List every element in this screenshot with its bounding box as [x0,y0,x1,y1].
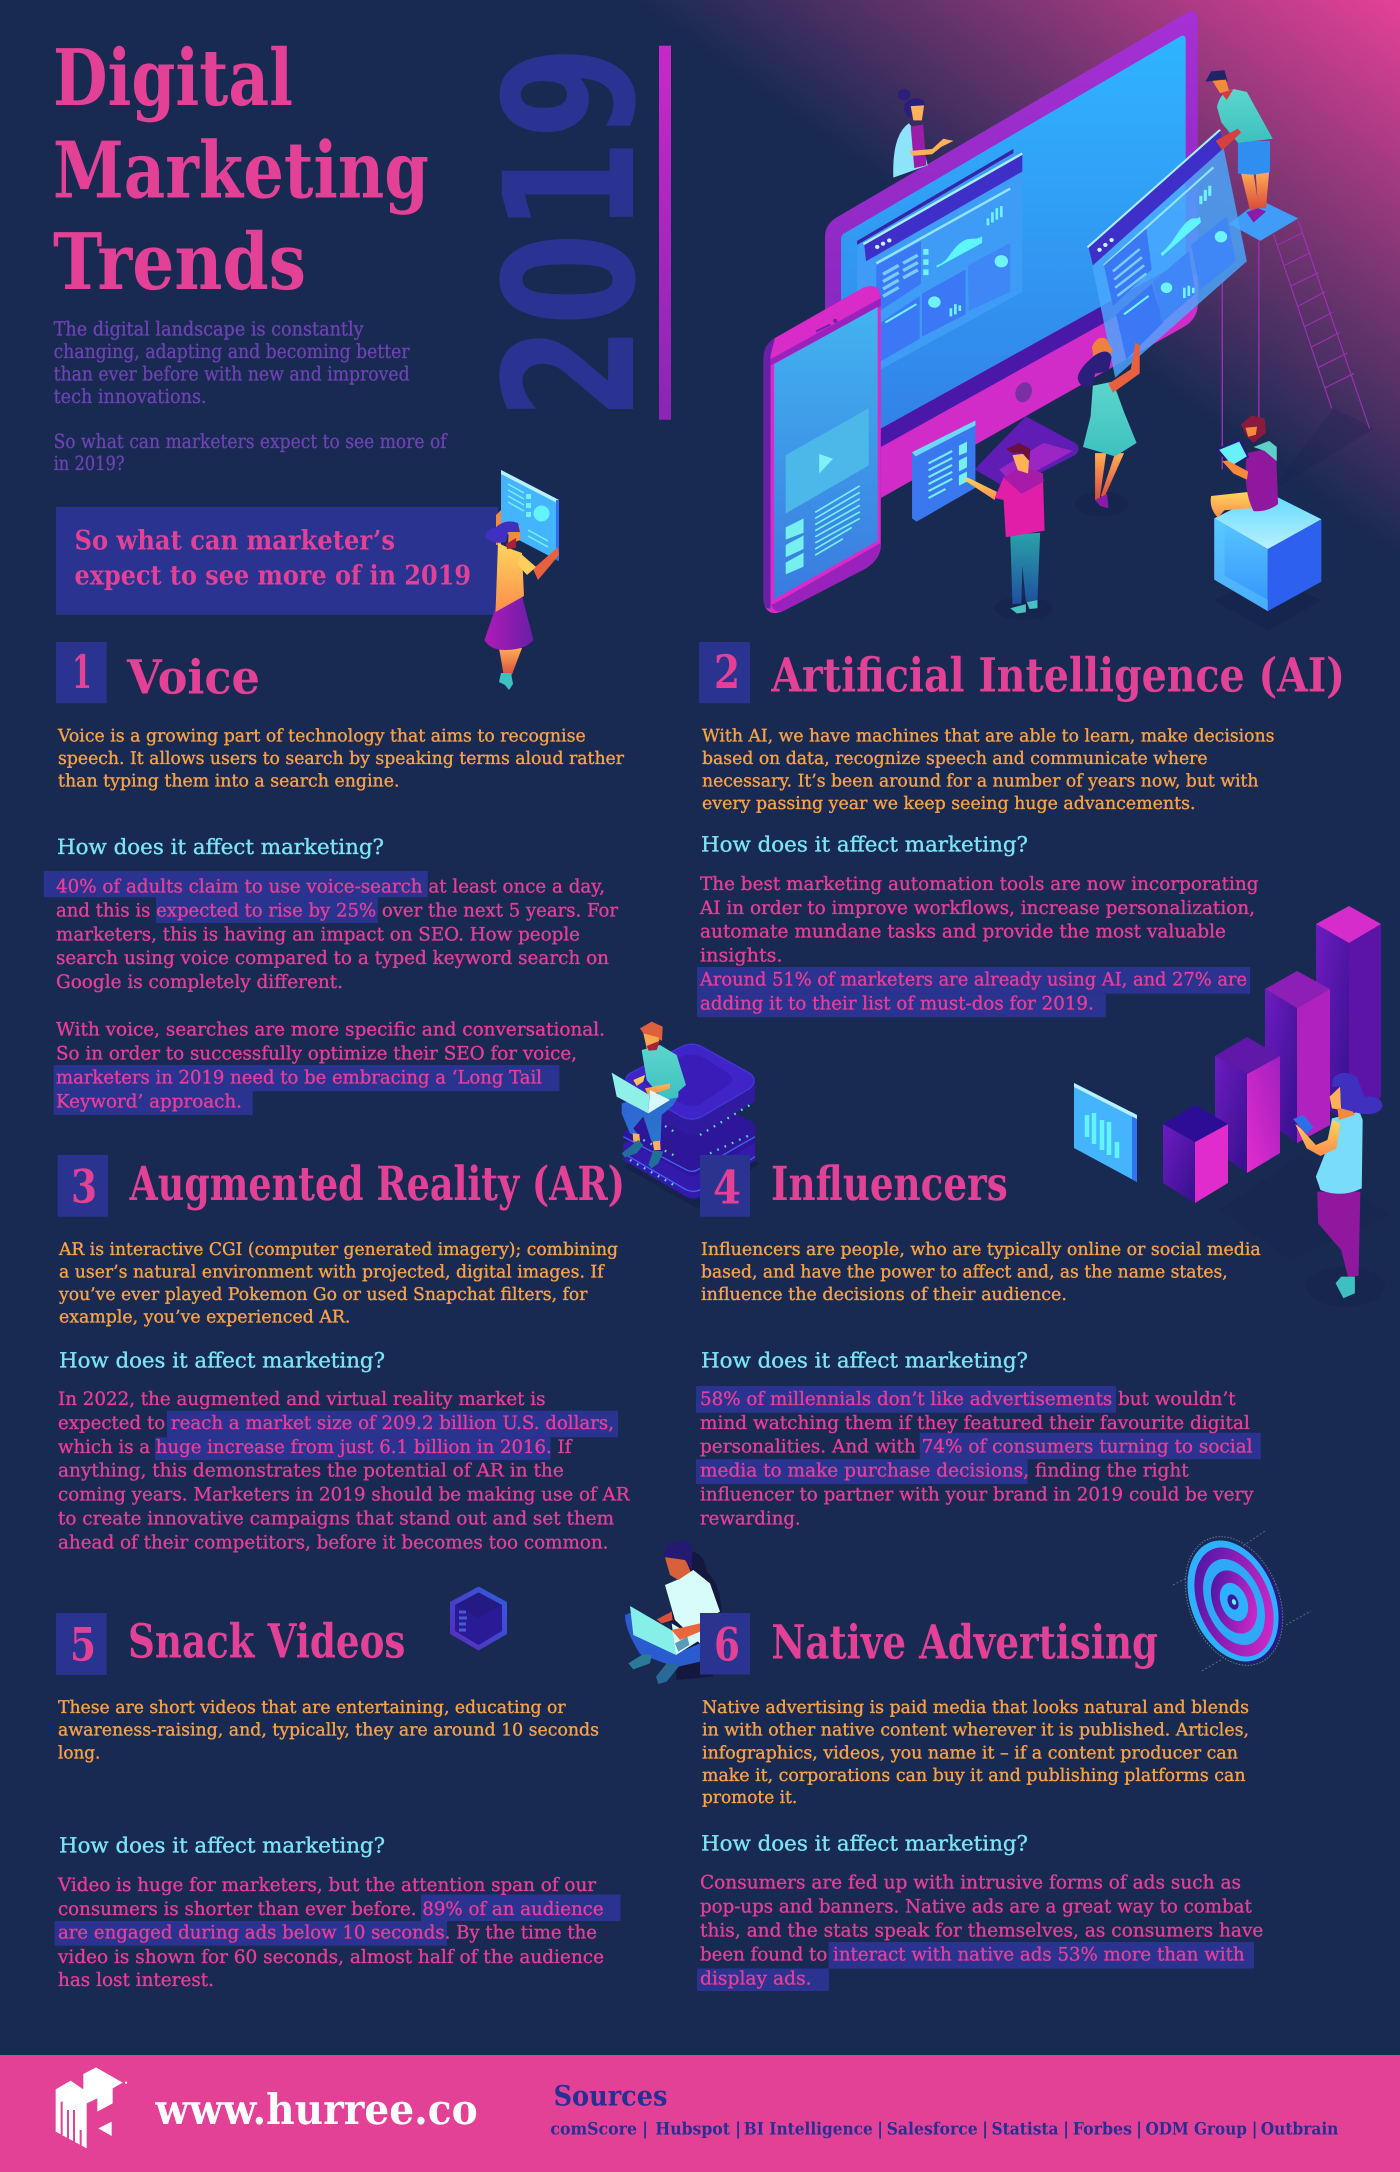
icon: target [1167,1522,1311,1680]
marketing impact text: has lost interest. [58,1970,214,1991]
sources list: | [735,2120,741,2140]
website url: www.hurree.co [154,2085,478,2134]
intro text [54,318,448,475]
body text: than typing them into a search engine. [58,772,400,792]
person: woman with phone [1293,1073,1385,1307]
sources list: BI Intelligence [744,2120,873,2140]
marketing impact text: search using voice compared to a typed keyword search on [56,948,609,969]
marketing impact text: Keyword’ approach. [56,1091,242,1112]
sources list: | [1136,2120,1142,2140]
illustration: monitor with team [763,11,1374,631]
panel: voice [44,642,625,1115]
icon: hexagon [450,1586,507,1650]
marketing impact text [54,1875,620,1991]
marketing impact text: media to make purchase decisions, finding the right [700,1461,1189,1482]
footer content [56,2067,1338,2148]
sources list: comScore [550,2120,637,2140]
subheading: How does it affect marketing? [59,1348,385,1372]
person detail: man on platform panel edge [1218,139,1223,149]
number badge: 5 [70,1618,96,1672]
marketing impact text: The best marketing automation tools are now incorporating [700,874,1259,895]
marketing impact text: With voice, searches are more specific and conversational. [56,1020,605,1041]
panel: native advertising [697,1613,1263,1991]
icon: bars with woman [1074,906,1390,1307]
body text: a user’s natural environment with projected, digital images. If [59,1262,605,1282]
body text: you’ve ever played Pokemon Go or used Snapchat filters, for [58,1285,588,1305]
marketing impact text: Consumers are fed up with intrusive forms of ads such as [700,1872,1241,1893]
number badge: 6 [714,1618,740,1672]
marketing impact text: ahead of their competitors, before it becomes too common. [58,1533,608,1554]
number badge [699,642,750,703]
body text [58,1240,618,1327]
marketing impact text: mind watching them if they featured their favourite digital [700,1413,1250,1434]
body text: speech. It allows users to search by speaking terms aloud rather [58,749,625,769]
icon: phone [763,286,881,613]
body text: long. [58,1743,100,1763]
monitor button [1013,381,1034,404]
person: woman with panel [484,470,559,690]
panel: augmented reality [58,1155,631,1554]
sources list: | [642,2120,648,2140]
marketing impact text [697,874,1259,1017]
callout [56,507,498,615]
person: woman on monitor [893,89,954,178]
marketing impact text: Around 51% of marketers are already using AI, and 27% are [699,969,1247,990]
monitor chin [881,273,1198,498]
vertical bar [659,46,671,420]
marketing impact text: coming years. Marketers in 2019 should be making use of AR [58,1485,631,1506]
icon: server with man [612,1022,760,1208]
intro text: The digital landscape is constantly [54,318,364,340]
body text [57,727,625,792]
body text: make it, corporations can buy it and publishing platforms can [702,1766,1246,1786]
floating panel with ladder [1087,130,1370,469]
body text: necessary. It’s been around for a number of years now, but with [702,772,1258,792]
person: woman in teal dress [1078,338,1140,508]
body text: Native advertising is paid media that looks natural and blends [702,1698,1249,1718]
footer band [0,2055,1400,2172]
monitor frame [825,11,1198,498]
sources list [550,2120,1338,2140]
number badge: 1 [72,645,92,699]
panel: snack videos [54,1613,620,1991]
title: Marketing [53,126,429,216]
number badge [700,1155,750,1217]
marketing impact text: marketers in 2019 need to be embracing a ‘Long Tail [56,1068,542,1089]
marketing impact text: which is a huge increase from just 6.1 billion in 2016. If [58,1437,573,1458]
body text [58,1698,599,1763]
number badge [58,1155,108,1217]
intro text: changing, adapting and becoming better [54,340,410,363]
body text [701,1240,1261,1305]
title [53,33,429,308]
monitor window [857,149,1022,369]
person: man at small panel [912,420,1045,614]
marketing impact text: AI in order to improve workflows, increase personalization, [699,898,1255,919]
marketing impact text: consumers is shorter than ever before. 89% of an audience [58,1899,604,1920]
marketing impact text: So in order to successfully optimize their SEO for voice, [56,1044,577,1065]
sources list: Forbes [1073,2120,1132,2140]
marketing impact text: Google is completely different. [56,972,343,993]
body text: With AI, we have machines that are able to learn, make decisions [702,727,1275,747]
sources list: | [877,2120,883,2140]
marketing impact text: are engaged during ads below 10 seconds. By the time the [58,1923,597,1944]
subheading: How does it affect marketing? [57,835,384,859]
body text: Voice is a growing part of technology that aims to recognise [57,727,586,747]
body text: in with other native content wherever it is published. Articles, [702,1721,1249,1741]
heading: Voice [126,650,260,705]
sources list: | [1252,2120,1258,2140]
floor shadows [995,408,1374,631]
body text: every passing year we keep seeing huge advancements. [702,794,1196,814]
number badge [700,1613,750,1674]
marketing impact text: personalities. And with 74% of consumers turning to social [700,1437,1253,1458]
sources list: | [1063,2120,1069,2140]
sources list: Hubspot [655,2120,730,2140]
marketing impact text: and this is expected to rise by 25% over the next 5 years. For [56,900,618,921]
subheading: How does it affect marketing? [701,1348,1028,1372]
marketing impact text: marketers, this is having an impact on SEO. How people [56,924,580,945]
heading: Influencers [771,1157,1008,1212]
number badge: 2 [714,645,740,699]
monitor stand [975,416,1079,489]
body text: Influencers are people, who are typically online or social media [701,1240,1261,1260]
title: Trends [53,217,306,308]
marketing impact text: 58% of millennials don’t like advertisements but wouldn’t [700,1389,1236,1410]
marketing impact text: pop-ups and banners. Native ads are a great way to combat [700,1896,1252,1917]
icon: cube with seated man [1211,416,1321,611]
marketing impact text [697,1872,1263,1991]
body text: These are short videos that are entertaining, educating or [58,1698,566,1718]
intro text: in 2019? [54,452,125,475]
body text [702,1698,1249,1808]
heading: Snack Videos [128,1615,405,1670]
marketing impact text: display ads. [700,1968,812,1989]
panel: artificial intelligence [697,642,1345,1017]
icon: hurree logo [56,2067,127,2148]
marketing impact text: anything, this demonstrates the potential of AR in the [58,1461,564,1482]
marketing impact text: video is shown for 60 seconds, almost half of the audience [57,1947,604,1968]
body text: example, you’ve experienced AR. [59,1307,350,1327]
marketing impact text: this, and the stats speak for themselves, as consumers have [700,1920,1263,1941]
subheading: How does it affect marketing? [701,1832,1028,1856]
body text: based on data, recognize speech and communicate where [702,749,1208,769]
number badge [56,1613,107,1675]
heading: Native Advertising [771,1616,1158,1671]
marketing impact text: rewarding. [700,1509,801,1530]
sources list: | [982,2120,988,2140]
sources list: Salesforce [887,2120,978,2140]
intro text: tech innovations. [54,385,207,408]
body text: promote it. [702,1788,797,1808]
callout: expect to see more of in 2019 [74,560,471,592]
callout: So what can marketer’s [74,525,395,556]
icon: sitting man with laptop [625,1540,722,1684]
marketing impact text: influencer to partner with your brand in 2019 could be very [700,1485,1254,1506]
body text: influence the decisions of their audience. [701,1285,1067,1305]
marketing impact text: 40% of adults claim to use voice-search at least once a day, [56,876,605,897]
body text: infographics, videos, you name it – if a content producer can [702,1744,1238,1764]
marketing impact text: adding it to their list of must-dos for 2019. [700,993,1094,1014]
bar chart: isometric columns [1163,906,1390,1260]
marketing impact text: Video is huge for marketers, but the attention span of our [57,1875,596,1896]
panel: influencers [696,1155,1261,1530]
icon: small bar panel [1074,1083,1137,1182]
subheading: How does it affect marketing? [701,833,1028,857]
marketing impact text: expected to reach a market size of 209.2 billion U.S. dollars, [58,1413,614,1434]
marketing impact text: automate mundane tasks and provide the most valuable [700,922,1226,943]
body text: awareness-raising, and, typically, they are around 10 seconds [58,1721,599,1741]
marketing impact text: In 2022, the augmented and virtual reality market is [58,1389,546,1410]
title: Digital [53,33,293,124]
heading: Augmented Reality (AR) [129,1157,625,1212]
marketing impact text: to create innovative campaigns that stand out and set them [58,1509,614,1530]
person: man with laptop [612,1022,686,1168]
intro text: So what can marketers expect to see more of [54,430,448,453]
subheading: How does it affect marketing? [59,1834,385,1858]
body text [702,727,1275,814]
person: man on platform [1205,70,1273,222]
body text: based, and have the power to affect and, as the name states, [701,1262,1228,1282]
sources list: Outbrain [1261,2120,1338,2140]
sources list: Statista [992,2120,1058,2140]
body text: AR is interactive CGI (computer generated imagery); combining [58,1240,618,1260]
number badge: 3 [71,1159,97,1213]
monitor screen [841,36,1186,429]
sources list: ODM Group [1146,2120,1247,2140]
number badge [56,642,107,703]
number badge: 4 [713,1160,741,1214]
sources heading: Sources [554,2080,667,2113]
marketing impact text: been found to interact with native ads 53% more than with [700,1944,1245,1965]
marketing impact text: insights. [700,946,783,967]
intro text: than ever before with new and improved [54,362,410,385]
marketing impact text [696,1386,1261,1530]
marketing impact text [58,1389,631,1554]
marketing impact text [44,871,618,1115]
